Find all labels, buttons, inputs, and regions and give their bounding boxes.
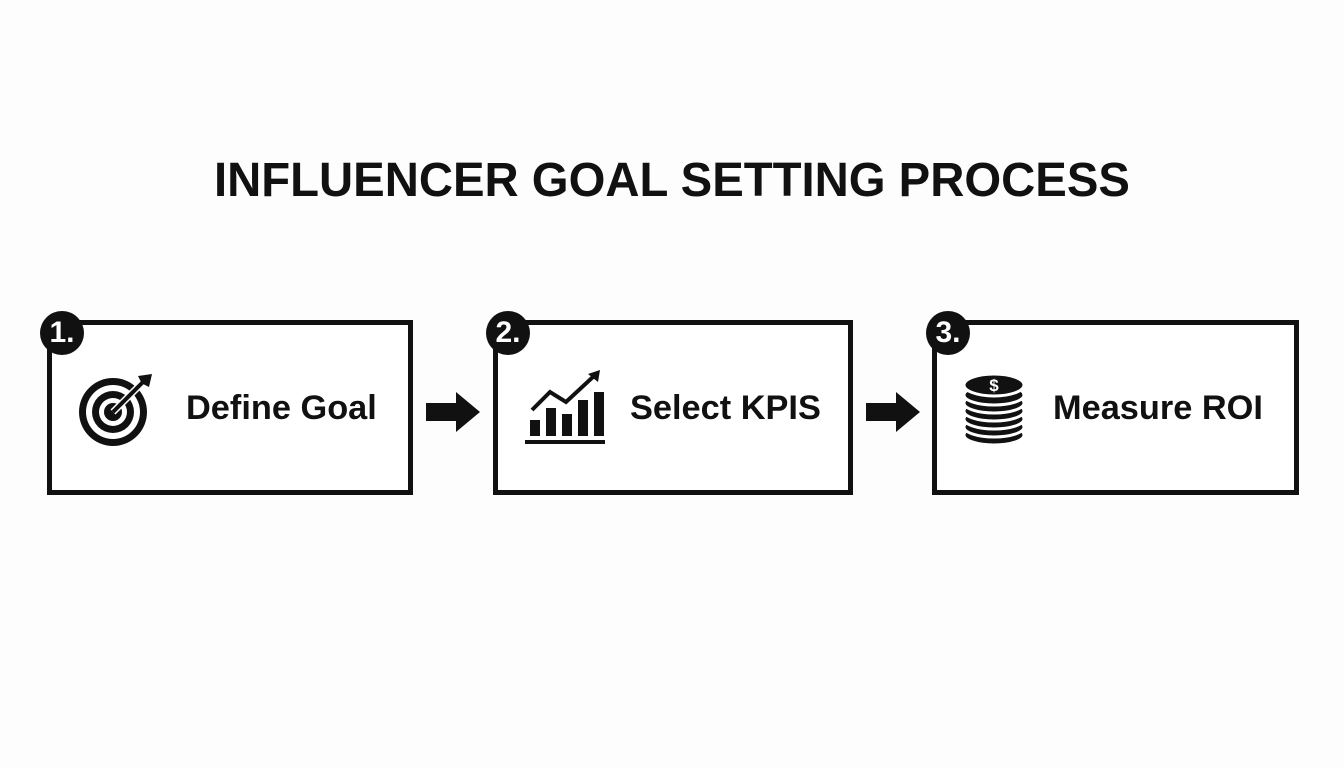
badge 3: 3. xyxy=(935,316,961,349)
arrow 1 xyxy=(426,392,480,432)
arrow 2 xyxy=(866,392,920,432)
label: Measure ROI: Measure ROI xyxy=(1053,389,1263,427)
icon: chart xyxy=(525,370,605,444)
label: Define Goal: Define Goal xyxy=(186,389,377,427)
icon: coins xyxy=(966,376,1022,444)
badge 1: 1. xyxy=(49,316,75,349)
badge 2: 2. xyxy=(495,316,521,349)
icon: coins: $ xyxy=(989,376,999,395)
badge 1 xyxy=(40,311,84,355)
badge 3 xyxy=(926,311,970,355)
label: Select KPIS: Select KPIS xyxy=(630,389,821,427)
panel: step 2 xyxy=(493,320,853,495)
panel: step 1 xyxy=(47,320,413,495)
badge 2 xyxy=(486,311,530,355)
icon: target xyxy=(79,374,152,446)
panel: step 3 xyxy=(932,320,1299,495)
title: INFLUENCER GOAL SETTING PROCESS xyxy=(214,154,1130,207)
